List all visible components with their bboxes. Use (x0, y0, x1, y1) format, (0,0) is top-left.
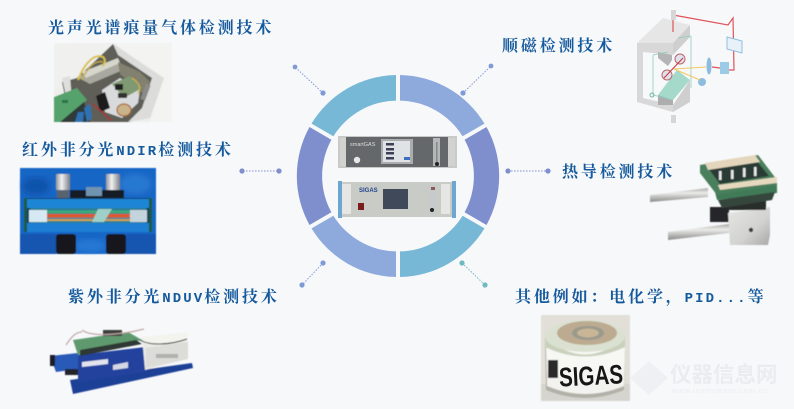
connector: left (239, 168, 282, 174)
image: thermal conductivity sensor (650, 155, 777, 245)
connector: right (505, 168, 551, 174)
watermark (630, 361, 778, 395)
title: photoacoustic: 光声光谱痕量气体检测技术 (48, 18, 274, 37)
title: others: 其他例如：电化学，PID...等 (515, 287, 767, 307)
image: SIGAS electrochemical sensor (541, 315, 630, 401)
connector: bottom left (299, 260, 326, 288)
image: paramagnetic diagram (637, 10, 742, 123)
device: smartGAS analyzer (338, 136, 457, 168)
title: thermal conductivity: 热导检测技术 (562, 162, 675, 181)
image: SIGAS electrochemical sensor: SIGAS (558, 359, 624, 393)
connector: top left (293, 65, 326, 96)
image: NDIR sensor (20, 168, 156, 254)
ring of six segments (297, 75, 499, 277)
connector: top right (460, 64, 493, 96)
device: SIGAS analyzer: SIGAS (359, 188, 378, 194)
image: photoacoustic module (54, 43, 172, 122)
device: smartGAS analyzer: smartGAS (350, 142, 376, 148)
title: paramagnetic: 顺磁检测技术 (502, 36, 615, 55)
watermark: 仪器信息网 (670, 362, 778, 387)
image: NDUV module (50, 329, 193, 394)
connector: bottom right (459, 260, 488, 288)
title: NDUV: 紫外非分光NDUV检测技术 (68, 287, 280, 307)
device: SIGAS analyzer (338, 181, 456, 218)
watermark: www.instrument.com.cn (671, 386, 768, 395)
title: NDIR: 红外非分光NDIR检测技术 (22, 140, 234, 160)
